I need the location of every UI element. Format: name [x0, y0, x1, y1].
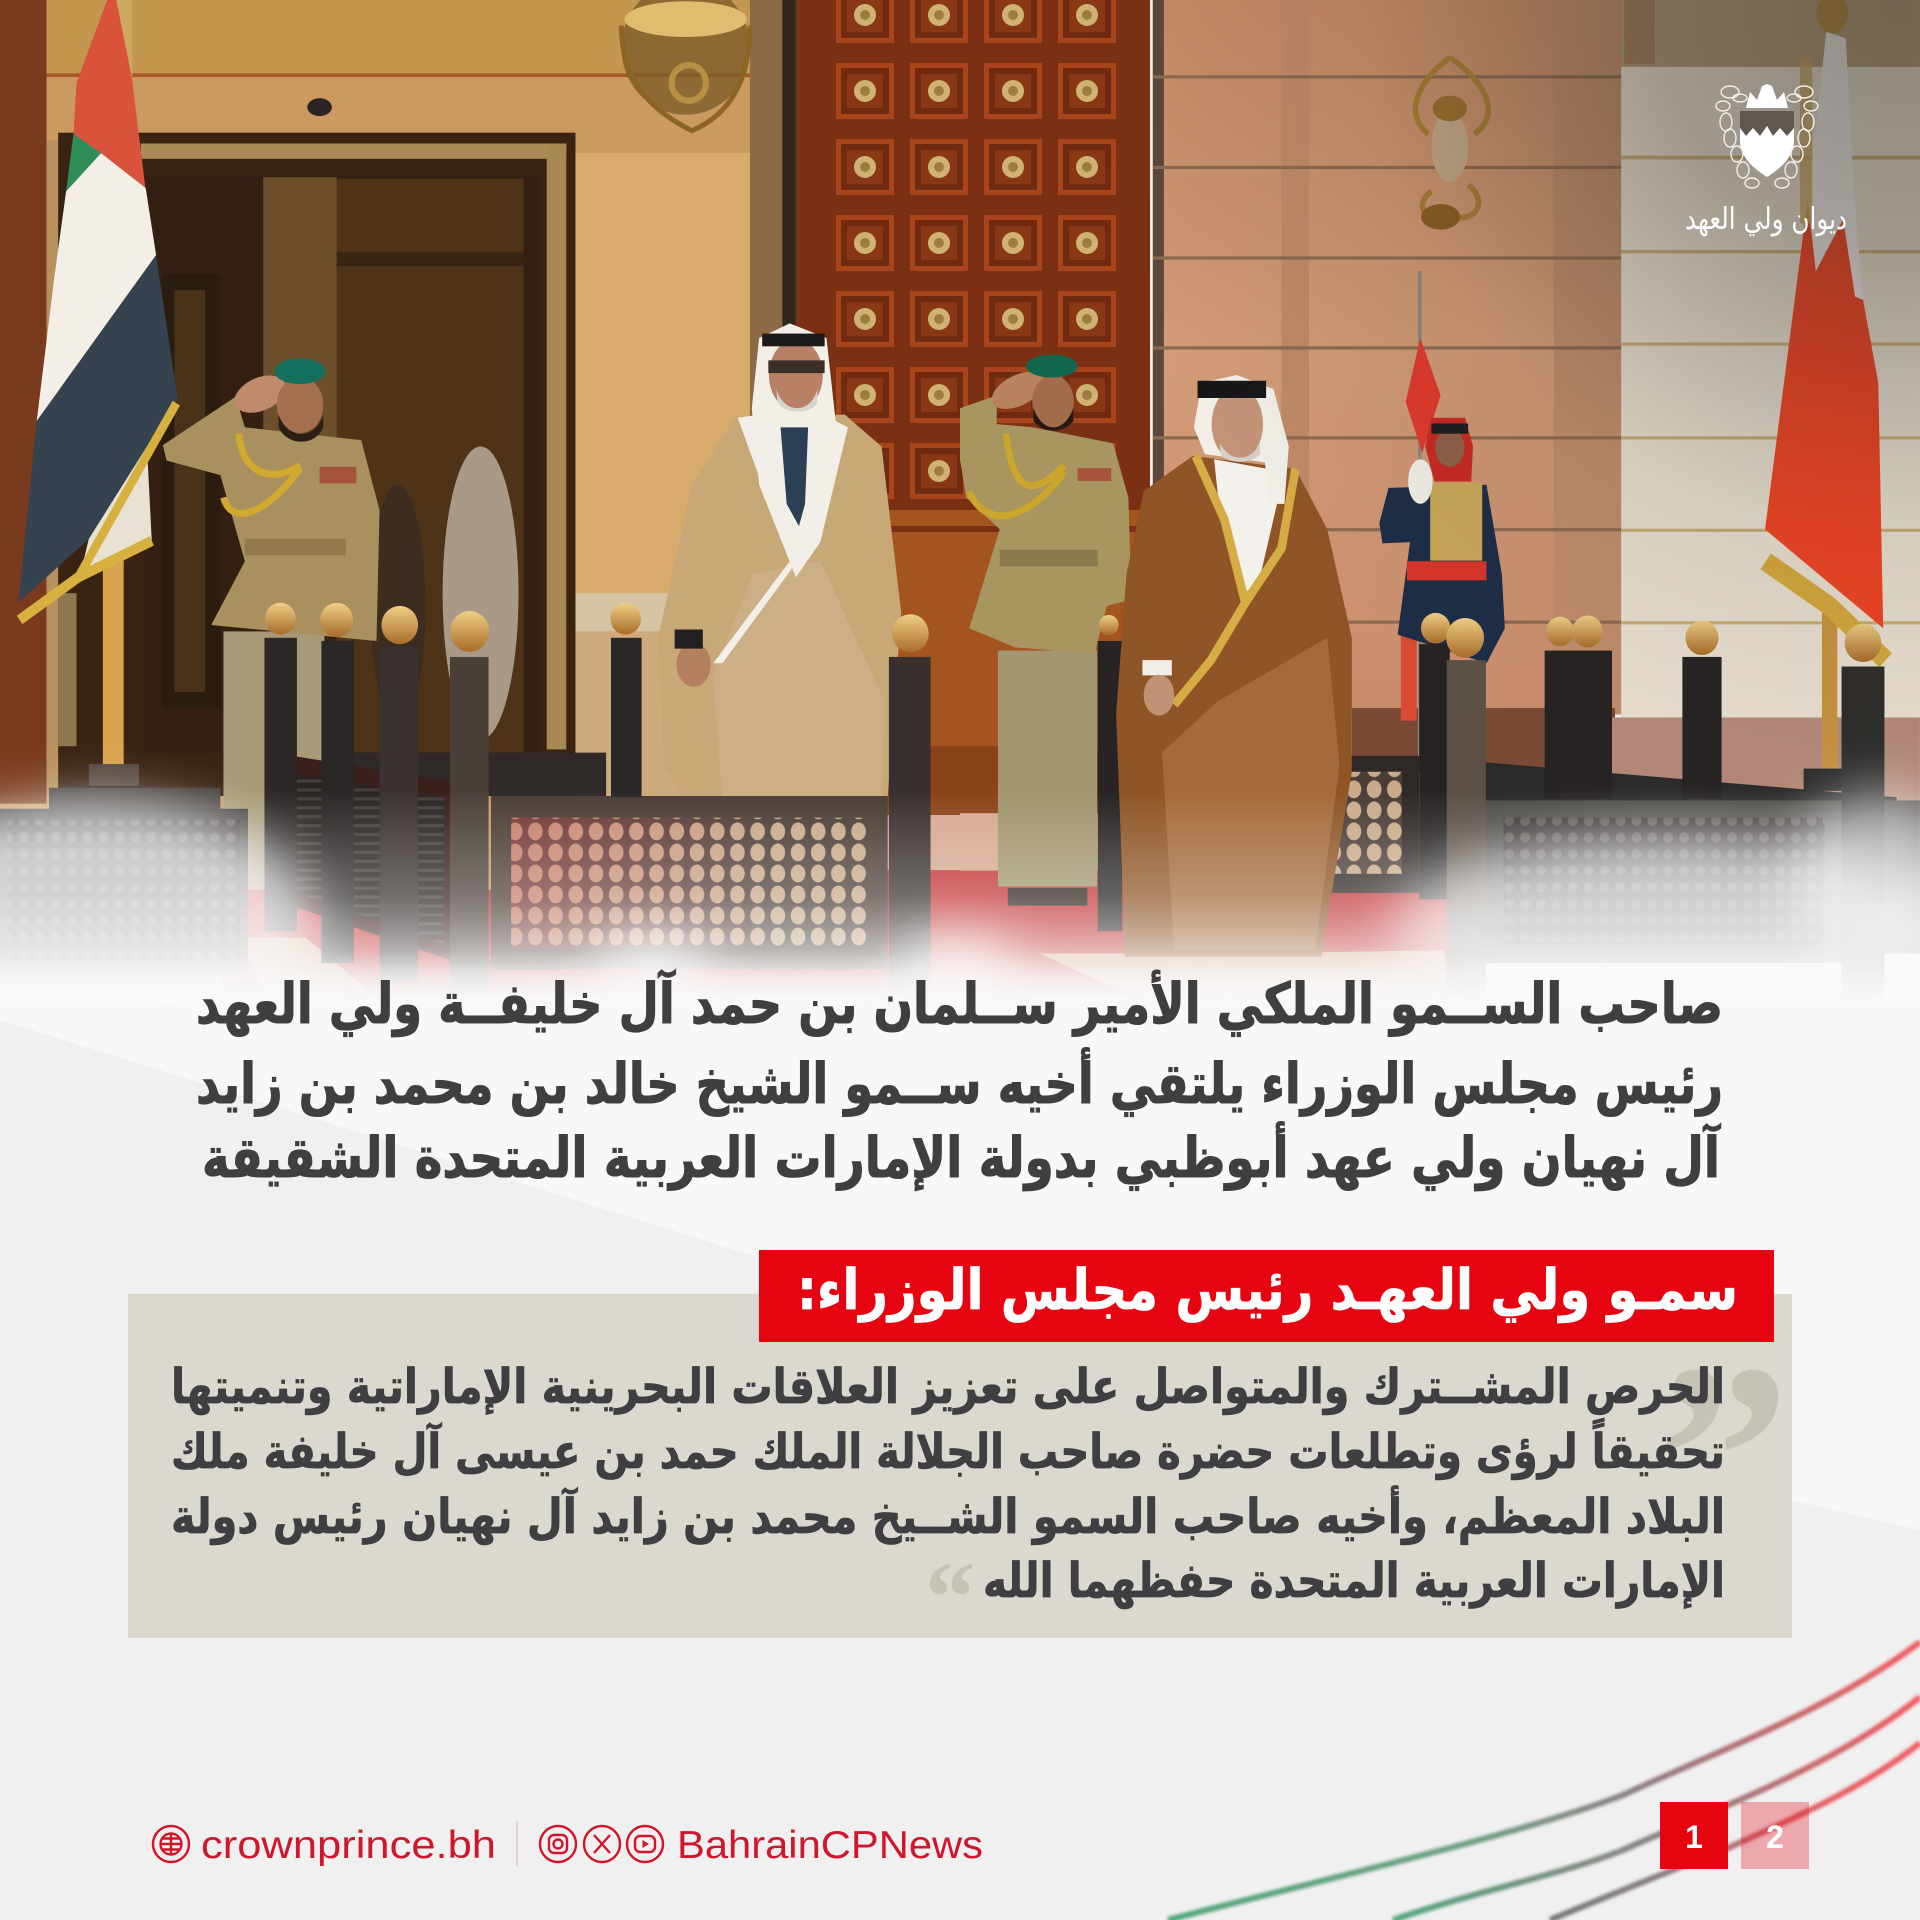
UAE flag pole	[89, 0, 139, 786]
icon: opening quote mark: ”	[1658, 1311, 1790, 1604]
bollard gold balls	[1099, 613, 1881, 662]
wall lantern	[1415, 57, 1488, 230]
panel: quotation box	[128, 1294, 1792, 1652]
back fence	[352, 753, 606, 796]
floor	[960, 813, 1447, 988]
Bahrain flag	[1765, 32, 1886, 660]
icon: closing quote mark: “	[925, 1541, 975, 1652]
carpet and floor strip	[248, 890, 796, 984]
white fade over the bottom of the photo	[0, 790, 1920, 1060]
bollards	[264, 638, 931, 984]
page indicator 2: 2	[1766, 1819, 1784, 1855]
ceremonial guard with flag	[1379, 271, 1505, 756]
social handle: BahrainCPNews	[677, 1824, 983, 1867]
icon: instagram	[540, 1826, 576, 1862]
bollards	[1098, 641, 1884, 982]
lattice fence panels	[1324, 756, 1920, 963]
dark side fence panels	[296, 756, 450, 960]
saluting guard in khaki	[960, 355, 1131, 906]
footer: website and social handles	[153, 1824, 983, 1867]
logo wordmark: ديوان ولي العهد	[1685, 202, 1847, 237]
page indicator 2	[1741, 1802, 1809, 1869]
dignitary in beige bisht	[658, 323, 901, 797]
left half of the scene	[0, 0, 960, 1042]
headline: three-line Arabic title	[196, 969, 1723, 1191]
lattice panel front	[491, 796, 888, 969]
chandelier	[621, 0, 750, 131]
door: carved wooden palace door	[796, 0, 1150, 1005]
bollard gold balls	[265, 603, 929, 652]
logo: crown prince court crest	[1685, 84, 1847, 237]
crown prince in brown bisht	[1116, 375, 1352, 957]
icon: crest shield and wreath	[1716, 84, 1818, 188]
cream wall	[1612, 0, 1920, 800]
door side strip	[750, 0, 796, 416]
UAE flag	[18, 0, 178, 620]
lattice base left	[0, 788, 248, 976]
doorway with gilded frame	[58, 133, 575, 796]
wall camera	[307, 98, 332, 116]
icon: globe	[153, 1826, 189, 1862]
quotation body text	[171, 1359, 1725, 1609]
saluting guard	[163, 358, 380, 887]
icon: X	[584, 1826, 620, 1862]
page indicator 1	[1660, 1802, 1728, 1869]
right wall beside opening	[569, 153, 753, 797]
right half of the scene	[960, 0, 1920, 1042]
red heading bar: سمـو ولي العهـد رئيس مجلس الوزراء:	[797, 1258, 1738, 1323]
dark vignette behind the logo	[1000, 0, 1920, 830]
photo: palace entrance with two dignitaries and guards	[0, 0, 1920, 1060]
decorative flag-coloured curves	[1168, 1642, 1920, 1920]
left wood pillar	[0, 0, 47, 804]
Bahrain flag pole	[1804, 0, 1848, 791]
website address: crownprince.bh	[201, 1824, 496, 1867]
quotation body text: الإمارات العربية المتحدة حفظهما الله	[983, 1553, 1725, 1609]
page indicator 1: 1	[1685, 1819, 1703, 1855]
red heading bar	[759, 1250, 1774, 1342]
salmon stone pillars	[1153, 0, 1624, 772]
icon: youtube	[627, 1826, 663, 1862]
